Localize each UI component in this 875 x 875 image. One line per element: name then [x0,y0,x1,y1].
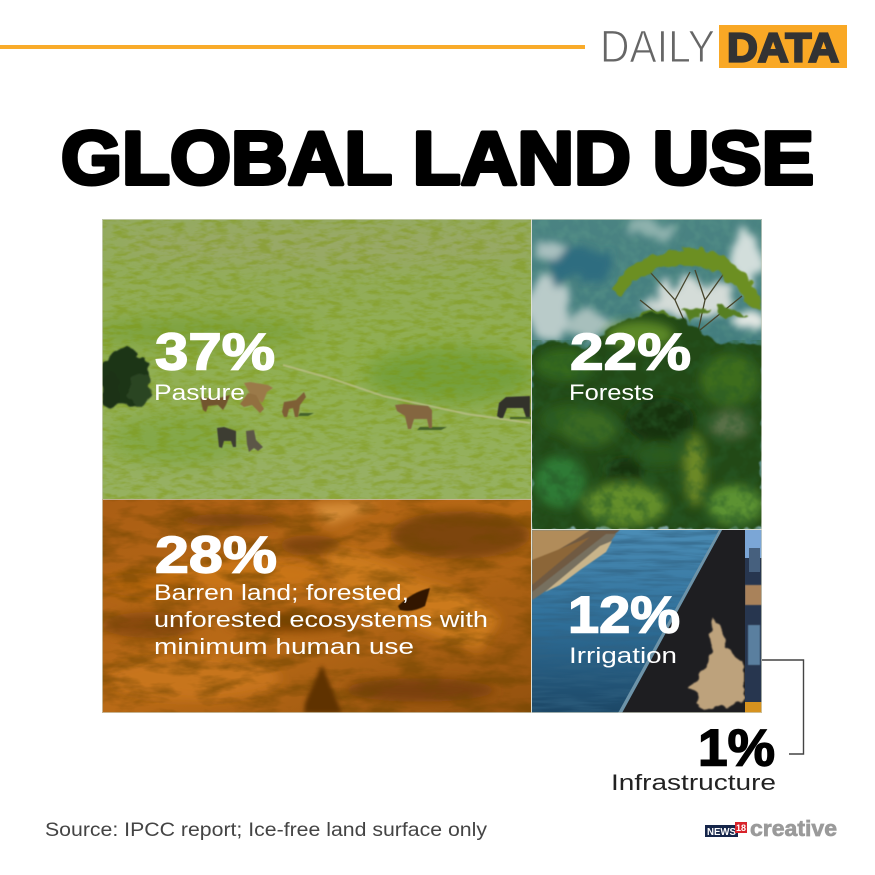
canal bank: sand and wall [532,530,620,600]
value: 28%: 28% [155,526,277,584]
logo: News18 Creative [705,816,837,841]
title: GLOBAL LAND USE [61,116,814,200]
panel borders [102,219,762,713]
label: Infrastructure: Infrastructure [611,770,776,795]
logo box: DATA: DATA [727,24,839,70]
label: Irrigation: Irrigation [569,643,677,668]
photo: grassland with horses [90,219,540,499]
panel: forests 22% [526,219,763,529]
source note: Source: IPCC report; Ice-free land surface only [45,820,488,841]
label: barren land description: minimum human use [154,634,414,659]
horses [200,382,532,452]
callout: infrastructure connector [762,660,804,754]
canopy: tall tree crown [612,248,762,330]
value: 12%: 12% [568,586,680,644]
panel: pasture 37% [90,219,540,499]
panel: irrigation 12% [532,530,745,713]
panel: infrastructure 1% [745,530,762,713]
photo: orange rock canyon [100,499,531,713]
photo: irrigation canal [532,530,745,713]
label: barren land description [154,580,488,659]
horse shadows [298,413,532,430]
panel: barren land 28% [100,499,531,713]
canopy: lower forest mass [532,314,762,529]
photo: rainforest canopy under clouds [526,219,763,529]
logo: News18 Creative: 18 [736,823,746,833]
header: accent rule [0,45,585,49]
logo word: DAILY: DAILY [600,21,715,72]
bush [100,350,152,407]
canopy: tall tree branches [640,270,742,330]
label: Forests: Forests [569,380,654,405]
value: 1%: 1% [698,720,775,778]
label: barren land description: Barren land; forested, [154,580,409,605]
logo: News18 Creative: NEWS [707,827,736,838]
label: barren land description: unforested ecosystems with [154,607,488,632]
logo: News18 Creative: creative [750,816,837,841]
value: 22%: 22% [570,324,691,382]
sand patch [688,618,744,708]
header: Daily Data logo [600,21,847,72]
canal bank: dark slope [622,530,745,713]
value: 37%: 37% [155,324,275,382]
dirt path [283,365,530,423]
label: Pasture: Pasture [154,380,245,405]
